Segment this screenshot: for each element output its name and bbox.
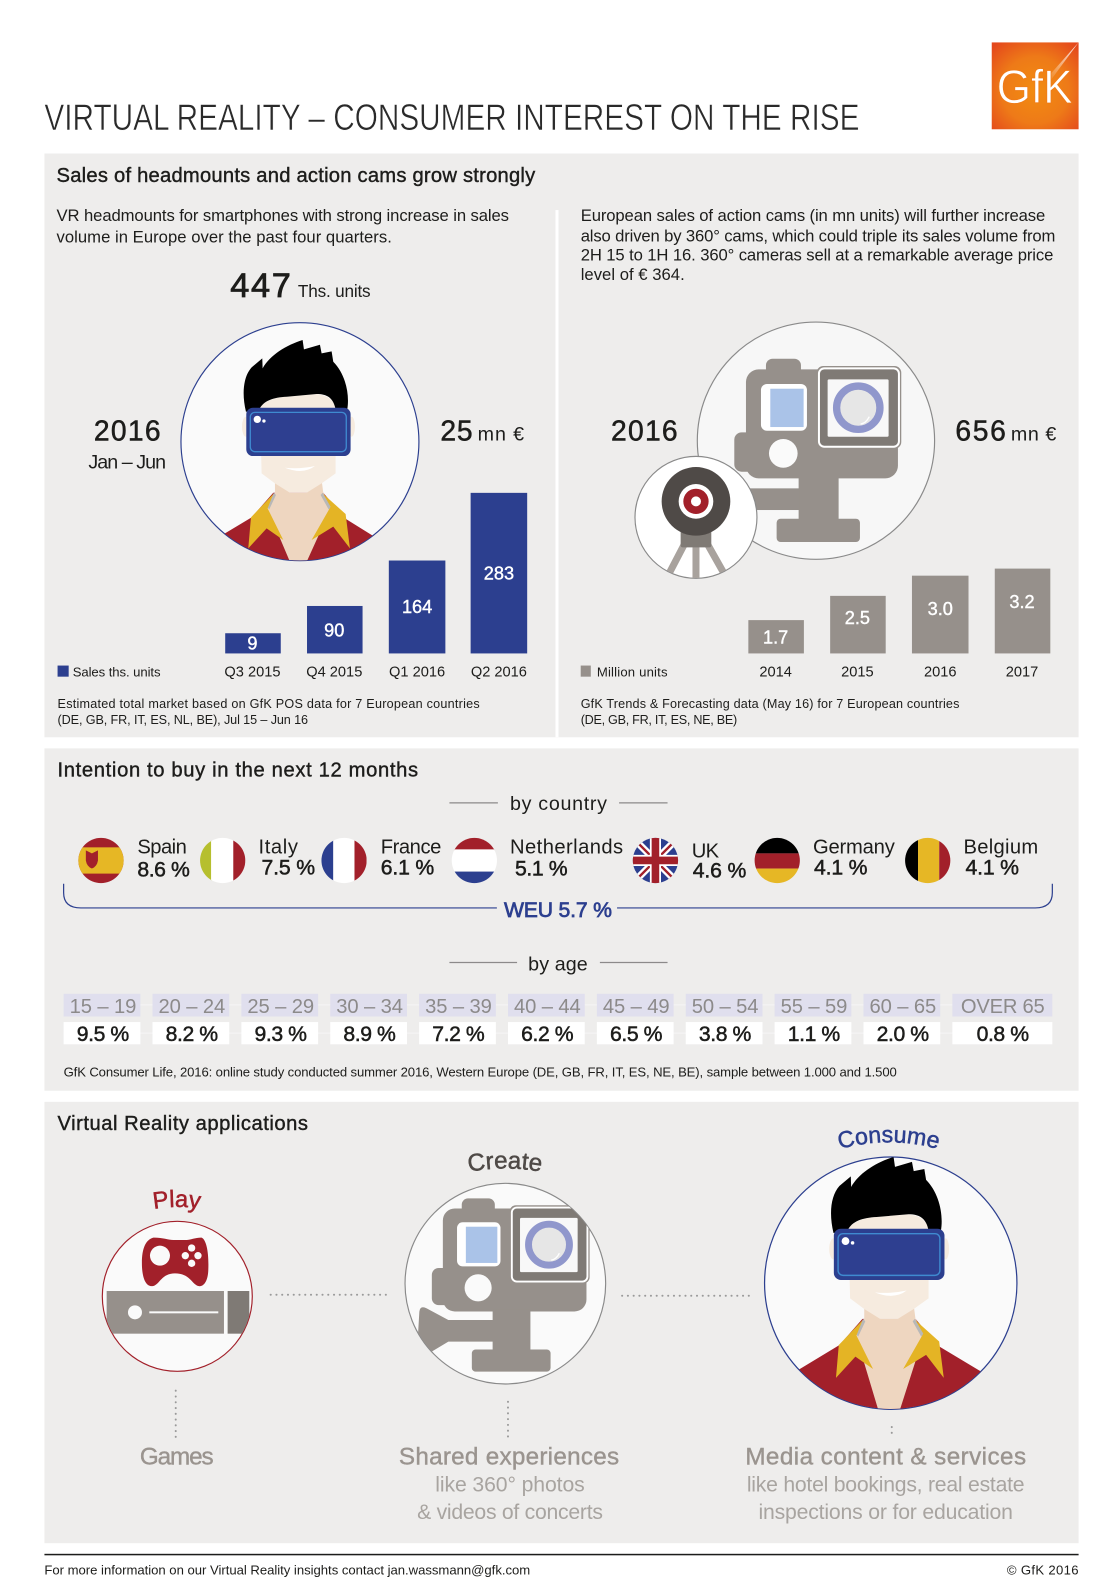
title: VIRTUAL REALITY – CONSUMER INTEREST ON THE RISE	[44, 97, 859, 138]
bar chart: VR headmount sales: 164	[402, 597, 432, 617]
table: intention by age	[64, 994, 1052, 1046]
bar chart: VR headmount sales: Q2 2016	[471, 665, 527, 681]
bar chart: action cam sales: 3.2	[1009, 592, 1035, 612]
text block: games: Games	[140, 1443, 214, 1470]
label: UK: UK	[692, 840, 720, 862]
bar chart: action cam sales: 2014	[759, 665, 792, 681]
bar chart: action cam sales: 1.7	[763, 627, 788, 647]
text block: media content and services: inspections or for education	[758, 1501, 1013, 1524]
illustration: man with VR headset large	[763, 1157, 1018, 1429]
text block: shared experiences: & videos of concerts	[417, 1501, 603, 1524]
text block: media content and services: like hotel bookings, real estate	[747, 1474, 1025, 1497]
bar chart: VR headmount sales: Q4 2015	[306, 665, 362, 681]
bar chart: action cam sales: Million units	[597, 665, 668, 680]
dotted connector: play to create	[271, 1294, 390, 1296]
label: Belgium: Belgium	[963, 836, 1038, 858]
bar chart: action cam sales: 3.0	[928, 599, 953, 619]
footnote: action cams source: GfK Trends & Forecasting data (May 16) for 7 European countries	[581, 697, 959, 711]
table: intention by age: 40 – 44	[514, 996, 581, 1018]
text block: action cams: European sales of action cams (in mn units) will further increase	[581, 206, 1045, 225]
subheading: by country: by country	[510, 793, 607, 815]
stat: 25 mn euro: mn €	[478, 423, 524, 445]
panel: virtual reality applications	[44, 1102, 1078, 1543]
bar chart: VR headmount sales	[58, 493, 527, 681]
label: UK: 4.6 %	[693, 860, 746, 883]
label: Italy: 7.5 %	[262, 857, 315, 880]
table: intention by age: 35 – 39	[425, 996, 492, 1018]
flag: France	[321, 836, 441, 884]
table: intention by age: 25 – 29	[247, 996, 314, 1018]
panel: intention to buy	[44, 748, 1079, 1091]
label: Italy	[259, 836, 315, 880]
stat: period 2016 Jan-Jun: Jan – Jun	[88, 452, 166, 474]
footnote: headmounts source: (DE, GB, FR, IT, ES, NL, BE), Jul 15 – Jun 16	[58, 713, 308, 727]
bar chart: VR headmount sales: 9	[247, 633, 258, 653]
label: Netherlands: Netherlands	[510, 836, 623, 858]
logo: GfK	[992, 42, 1079, 129]
bar chart: VR headmount sales: Q3 2015	[224, 665, 281, 681]
table: intention by age: 1.1 %	[788, 1023, 840, 1046]
bar chart: action cam sales: 2.5	[845, 608, 870, 628]
heading: applications: Virtual Reality applications	[58, 1113, 308, 1135]
flag: Spain	[78, 836, 190, 884]
table: intention by age: 9.5 %	[77, 1023, 129, 1046]
flag: Belgium	[905, 836, 1038, 884]
flag: UK	[632, 837, 746, 884]
label: Spain: 8.6 %	[137, 859, 190, 882]
bar chart: VR headmount sales: Sales ths. units	[73, 665, 161, 680]
label: Germany: 4.1 %	[814, 857, 868, 880]
table: intention by age: 30 – 34	[336, 996, 403, 1018]
curved label: Consume: Consume	[838, 1130, 939, 1148]
table: intention by age: 9.3 %	[254, 1023, 307, 1046]
stat: 2016: 2016	[611, 414, 678, 446]
icon: action camera	[405, 1183, 606, 1384]
panel: sales	[44, 154, 1079, 737]
footer	[44, 1554, 1079, 1578]
table: intention by age: OVER 65	[961, 996, 1045, 1018]
text block: action cams: 2H 15 to 1H 16. 360° cameras sell at a remarkable average price	[581, 246, 1053, 265]
label: France: 6.1 %	[381, 857, 434, 880]
label: Spain: Spain	[137, 836, 187, 858]
table: intention by age: 15 – 19	[70, 996, 136, 1018]
icon: webcam on tripod	[635, 456, 757, 580]
stat: 447 thousand units: Ths. units	[298, 281, 371, 301]
table: intention by age: 8.9 %	[343, 1023, 396, 1046]
dotted connector: shared experiences	[507, 1402, 509, 1437]
label: Belgium	[963, 836, 1038, 880]
footnote: action cams source	[581, 697, 959, 727]
logo: GfK: GfK	[997, 61, 1073, 114]
text block: media content and services	[745, 1443, 1026, 1524]
text block: action cams: level of € 364.	[581, 265, 685, 284]
icon: game controller and console	[102, 1221, 252, 1371]
table: intention by age: 2.0 %	[877, 1023, 929, 1046]
stat: 447 thousand units: 447	[230, 267, 291, 305]
curved label: Create: Create	[468, 1153, 542, 1172]
table: intention by age: 3.8 %	[699, 1023, 752, 1046]
table: intention by age: 0.8 %	[977, 1023, 1029, 1046]
text block: shared experiences: like 360° photos	[435, 1474, 585, 1497]
bar chart: VR headmount sales: 283	[484, 564, 514, 584]
table: intention by age: 60 – 65	[870, 996, 936, 1018]
curved label: Play: Play	[153, 1190, 202, 1213]
footer: © GfK 2016	[1007, 1563, 1079, 1578]
table: intention by age: 8.2 %	[166, 1023, 218, 1046]
table: intention by age: 6.5 %	[610, 1023, 663, 1046]
bar chart: action cam sales: 2015	[841, 665, 874, 681]
illustration: action camera	[635, 322, 935, 580]
stat: 447 thousand units	[230, 267, 371, 305]
heading: intention: Intention to buy in the next 12 months	[58, 760, 418, 782]
bar chart: VR headmount sales: 90	[324, 620, 344, 640]
label: France	[381, 836, 441, 880]
label: Germany	[813, 836, 896, 880]
text block: shared experiences: Shared experiences	[399, 1443, 619, 1470]
text block: action cams: also driven by 360° cams, which could triple its sales volume from	[581, 226, 1055, 245]
table: intention by age: 50 – 54	[692, 996, 758, 1018]
stat: 656 mn euro: 656	[955, 414, 1006, 446]
table: intention by age: 7.2 %	[432, 1023, 485, 1046]
label: Belgium: 4.1 %	[965, 857, 1019, 880]
dotted connector: games	[175, 1391, 177, 1437]
flag: Italy	[200, 836, 315, 884]
text block: shared experiences	[399, 1443, 619, 1524]
dotted connector: media content	[891, 1427, 893, 1437]
illustration: man with VR headset	[181, 323, 419, 577]
stat: period 2016 Jan-Jun	[88, 414, 166, 474]
footnote: action cams source: (DE, GB, FR, IT, ES, NE, BE)	[581, 713, 737, 727]
label: Netherlands	[510, 836, 623, 881]
bar chart: action cam sales: 2016	[924, 665, 957, 681]
footnote: headmounts source: Estimated total market based on GfK POS data for 7 European countries	[58, 697, 480, 711]
flag: Germany	[754, 836, 896, 885]
stat: 25 mn euro: 25	[440, 414, 473, 446]
label: Germany: Germany	[813, 836, 896, 858]
bracket: WEU average	[64, 884, 1052, 922]
stat: 25 mn euro	[440, 414, 524, 446]
table: intention by age: 55 – 59	[781, 996, 847, 1018]
flag: Netherlands	[451, 836, 623, 885]
bar chart: action cam sales	[581, 569, 1050, 681]
bar chart: VR headmount sales: Q1 2016	[389, 665, 445, 681]
label: France: France	[381, 836, 441, 858]
text block: headmounts: volume in Europe over the past four quarters.	[57, 227, 392, 246]
text block: headmounts: VR headmounts for smartphones with strong increase in sales	[57, 206, 509, 225]
text block: action cams	[581, 206, 1055, 284]
heading: sales: Sales of headmounts and action cams grow strongly	[57, 165, 536, 187]
stat: period 2016 Jan-Jun: 2016	[94, 414, 161, 446]
label: Italy: Italy	[259, 836, 299, 858]
text block: media content and services: Media content & services	[745, 1443, 1026, 1470]
label: UK	[692, 840, 746, 883]
table: intention by age: 6.2 %	[521, 1023, 574, 1046]
subheading: by age: by age	[528, 954, 588, 976]
label: Netherlands: 5.1 %	[515, 858, 568, 881]
table: intention by age: 20 – 24	[159, 996, 225, 1018]
stat: 656 mn euro: mn €	[1011, 423, 1056, 445]
bar chart: action cam sales: 2017	[1006, 665, 1038, 681]
label: Spain	[137, 836, 190, 882]
dotted connector: create to consume	[622, 1295, 751, 1297]
table: intention by age: 45 – 49	[603, 996, 670, 1018]
stat: 656 mn euro	[955, 414, 1056, 446]
footnote: consumer life source: GfK Consumer Life, 2016: online study conducted summer 2016, Western Europe (DE, GB, FR, IT, ES, NE, BE), sample between 1.000 and 1.500	[64, 1065, 897, 1080]
text block: headmounts	[57, 206, 509, 246]
footer: For more information on our Virtual Reality insights contact jan.wassmann@gfk.com	[44, 1563, 530, 1578]
bracket: WEU average: WEU 5.7 %	[504, 899, 612, 922]
footnote: headmounts source	[58, 697, 480, 727]
